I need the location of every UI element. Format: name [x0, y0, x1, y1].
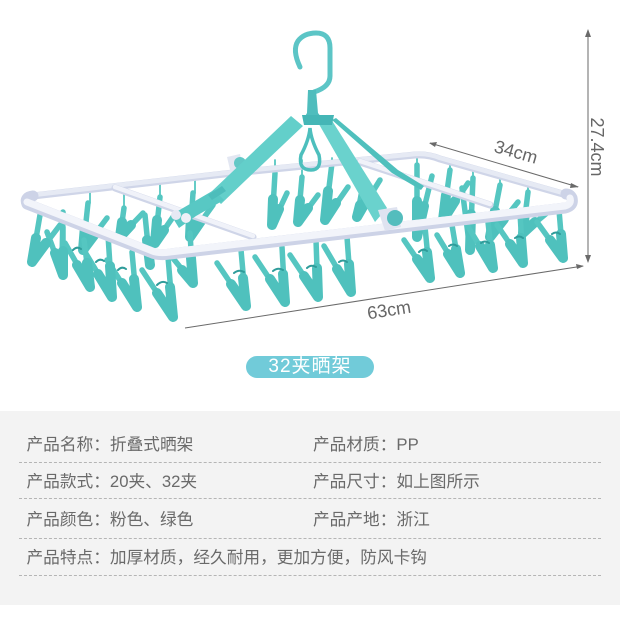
hub	[302, 115, 334, 125]
spec: 产品款式: 产品款式：20夹、32夹	[26, 472, 197, 491]
right arm	[316, 119, 387, 222]
spec: 产品材质: 产品材质：PP	[313, 435, 419, 454]
frame: back rail	[33, 154, 570, 237]
stem	[304, 90, 322, 118]
end cap	[378, 207, 401, 231]
frame: front rail	[26, 194, 572, 255]
dimension: 34cm	[429, 136, 579, 188]
dimension: 63cm	[185, 264, 584, 328]
spec: 产品特点: 产品特点：加厚材质，经久耐用，更加方便，防风卡钩	[26, 548, 427, 567]
spec: 产品名称: 产品名称：折叠式晒架	[26, 435, 193, 454]
spec: 产品尺寸: 产品尺寸：如上图所示	[313, 472, 480, 491]
hanger arms and hook	[171, 33, 424, 231]
drop ring	[300, 128, 320, 170]
hook	[295, 33, 330, 92]
spec: 产品产地: 产品产地：浙江	[313, 510, 430, 529]
joint	[171, 210, 181, 220]
dimension: 27.4cm: 27.4cm	[587, 117, 607, 177]
spec: 产品颜色: 产品颜色：粉色、绿色	[26, 510, 193, 529]
back row clips	[62, 153, 548, 265]
dimension: 63cm: 63cm	[366, 297, 412, 323]
left arm	[210, 116, 303, 204]
rear cap	[227, 154, 244, 174]
product illustration: folding clip hanger with dimensions	[20, 29, 607, 328]
panel: product specifications	[0, 411, 620, 605]
front row clips	[32, 210, 563, 317]
dimension: 27.4cm	[585, 29, 607, 263]
label pill: 32夹晒架	[246, 356, 374, 378]
dimension: 34cm: 34cm	[492, 136, 540, 168]
label pill: 32夹晒架: 32夹晒架	[268, 356, 352, 377]
right thin arm	[332, 118, 424, 190]
